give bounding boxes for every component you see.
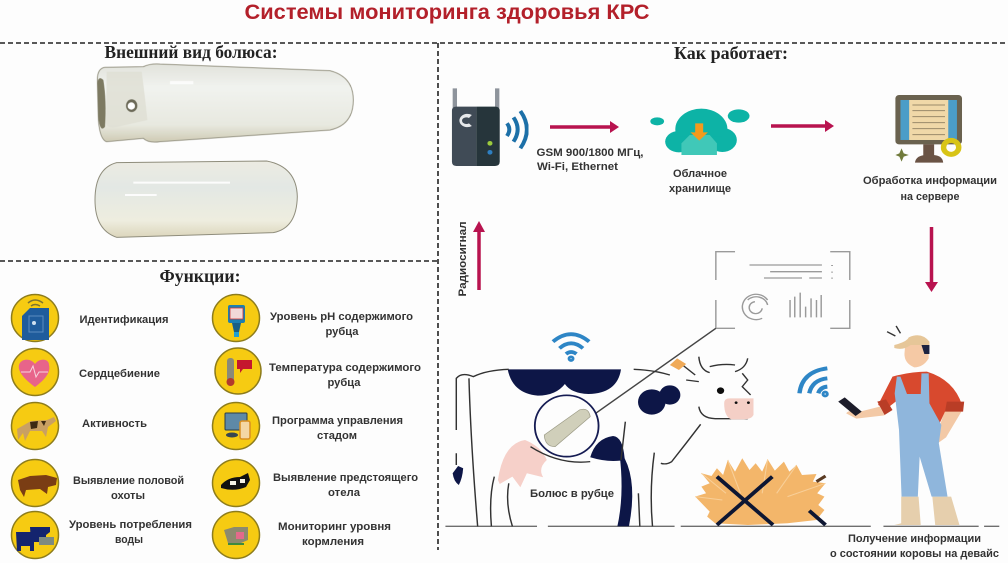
label: server processing: Обработка информации bbox=[863, 175, 997, 187]
labels right column: рубца bbox=[326, 326, 359, 338]
icon: feeding monitoring bbox=[224, 527, 248, 544]
icon: heat detection cattle bbox=[18, 475, 57, 497]
label: bolus in rumen: Болюс в рубце bbox=[530, 488, 614, 500]
icon: identification bbox=[22, 300, 49, 340]
label: device info: Получение информации bbox=[848, 533, 981, 545]
pointer line bbox=[596, 328, 716, 413]
label: connectivity: GSM 900/1800 МГц, bbox=[536, 147, 644, 159]
data panel bbox=[716, 252, 850, 328]
label: device info bbox=[830, 533, 999, 560]
farmer bbox=[838, 326, 964, 525]
cow bbox=[453, 357, 753, 526]
labels right column: Температура содержимого bbox=[269, 362, 421, 374]
hay with cross bbox=[695, 458, 826, 525]
heading: bolus appearance: Внешний вид болюса: bbox=[104, 42, 278, 62]
labels right column: рубца bbox=[328, 377, 361, 389]
arrow: radio signal up bbox=[477, 231, 481, 290]
icon: pH meter bbox=[228, 305, 245, 337]
icon: router bbox=[452, 88, 527, 166]
label: server processing bbox=[863, 175, 997, 203]
bolus photos bbox=[95, 64, 353, 237]
labels right column: Программа управления bbox=[272, 415, 403, 427]
illustration: cow, hay, farmer bbox=[445, 252, 999, 526]
arrow: cloud to server bbox=[771, 124, 825, 128]
labels right column: Мониторинг уровня bbox=[278, 521, 391, 533]
label: radio signal: Радиосигнал bbox=[457, 221, 469, 297]
labels right column: Уровень pH содержимого bbox=[270, 311, 413, 323]
bolus in magnifier bbox=[535, 395, 599, 457]
label: connectivity: Wi-Fi, Ethernet bbox=[537, 161, 618, 173]
labels right column: Выявление предстоящего bbox=[273, 472, 418, 484]
ground bbox=[445, 524, 999, 528]
labels right column: кормления bbox=[302, 536, 364, 548]
icon: server monitor bbox=[895, 95, 962, 163]
panel: how it works bbox=[445, 43, 999, 560]
labels left column: Сердцебиение bbox=[79, 368, 160, 380]
labels left column: Идентификация bbox=[80, 314, 168, 326]
open bolus bbox=[97, 64, 353, 142]
labels left column: Выявление половой bbox=[73, 475, 184, 487]
labels right column: отела bbox=[328, 487, 361, 499]
labels left column bbox=[69, 314, 192, 546]
panel: functions bbox=[12, 266, 421, 558]
icon: wifi above cow bbox=[553, 334, 589, 360]
label: device info: о состоянии коровы на девайс bbox=[830, 548, 999, 560]
icon: temperature bbox=[226, 358, 252, 386]
heading: functions: Функции: bbox=[160, 266, 240, 286]
panel: bolus appearance bbox=[95, 42, 353, 237]
icon: water consumption cows bbox=[16, 527, 54, 551]
icon: herd software bbox=[225, 413, 250, 439]
icon: wifi to phone bbox=[799, 368, 827, 395]
icon: activity cow bbox=[17, 417, 56, 441]
icon: heartbeat bbox=[19, 360, 49, 387]
labels left column: Активность bbox=[82, 418, 147, 430]
icon: calving detection bbox=[221, 473, 250, 490]
heading: how it works: Как работает: bbox=[674, 43, 788, 63]
title: Системы мониторинга здоровья КРС bbox=[244, 1, 650, 24]
closed bolus bbox=[95, 161, 297, 237]
labels left column: охоты bbox=[111, 490, 145, 502]
label: cloud storage bbox=[669, 168, 731, 195]
icon: cloud storage bbox=[650, 109, 750, 155]
label: server processing: на сервере bbox=[900, 191, 960, 203]
labels left column: Уровень потребления bbox=[69, 519, 192, 531]
label: cloud storage: Облачное bbox=[673, 168, 727, 180]
labels right column bbox=[269, 311, 421, 548]
labels left column: воды bbox=[115, 534, 143, 546]
labels right column: стадом bbox=[317, 430, 357, 442]
label: connectivity bbox=[536, 147, 644, 173]
label: cloud storage: хранилище bbox=[669, 183, 731, 195]
arrow: server to farmer bbox=[930, 227, 933, 282]
arrow: router to cloud bbox=[550, 125, 610, 129]
